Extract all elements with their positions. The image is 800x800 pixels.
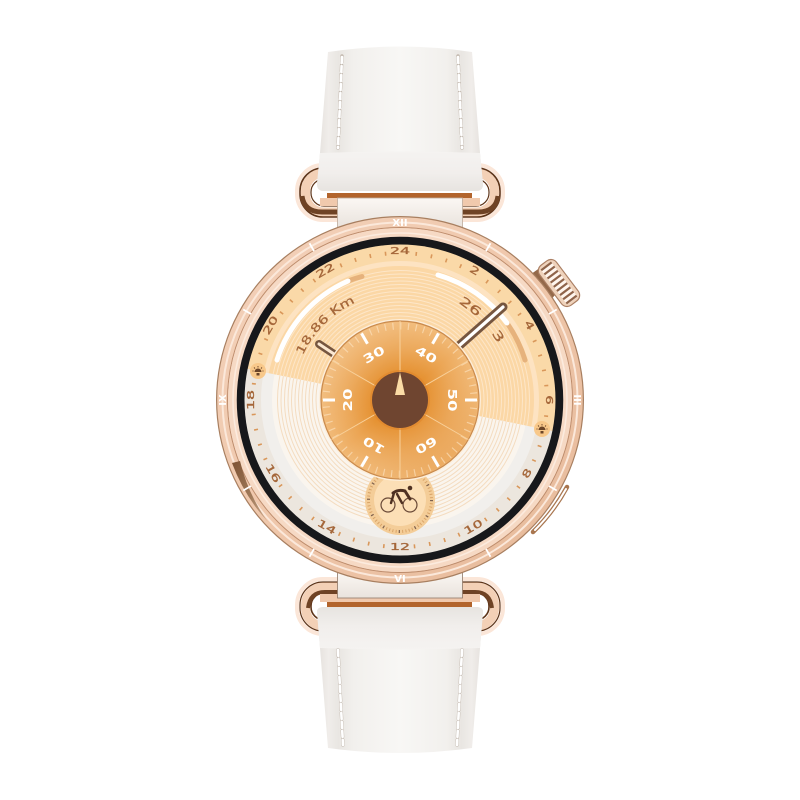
hour numbers: 6 <box>543 395 554 405</box>
dial night half <box>244 368 552 556</box>
hour numbers: 10 <box>462 518 485 538</box>
top brown strip <box>327 193 472 198</box>
disc shading <box>322 322 478 478</box>
bottom strap leather <box>317 607 483 753</box>
brown hub <box>372 372 428 428</box>
roman numerals: III <box>571 394 582 406</box>
top stitching <box>338 56 462 148</box>
hour numbers <box>246 246 554 553</box>
hour numbers: 22 <box>314 262 337 281</box>
inner highlight <box>233 233 567 567</box>
top strap <box>297 46 503 220</box>
disc numbers: 50 <box>445 388 459 412</box>
hour numbers: 8 <box>521 467 535 481</box>
crown <box>527 257 582 309</box>
hour numbers: 20 <box>262 314 281 337</box>
bottom strap <box>297 579 503 753</box>
value text 26: 26 <box>457 294 484 319</box>
bottom strap fold <box>317 607 483 650</box>
bezel shadow reflection <box>232 461 268 522</box>
spokes <box>332 321 468 479</box>
hour numbers: 18 <box>246 390 257 410</box>
watch case <box>216 216 584 585</box>
disc numbers: 60 <box>413 433 439 457</box>
roman numerals <box>218 218 582 585</box>
bezel inner groove <box>228 228 572 572</box>
hub glow <box>370 370 430 430</box>
top link bar <box>338 198 462 228</box>
disc numbers: 40 <box>413 343 439 367</box>
top strap fold <box>317 152 483 191</box>
subdial outer ring <box>365 465 435 535</box>
hour numbers: 12 <box>390 542 410 553</box>
roman numerals: VI <box>394 574 406 585</box>
black screen ring <box>241 241 559 559</box>
bezel ticks <box>243 243 557 557</box>
hour numbers: 4 <box>521 319 536 333</box>
distance text: 18.86 Km <box>296 298 354 354</box>
hour ticks <box>253 253 547 547</box>
hour numbers: 16 <box>262 462 282 485</box>
bezel <box>217 217 583 583</box>
short hand <box>319 344 340 358</box>
left progress arc <box>277 276 362 360</box>
activity subdial <box>365 465 435 535</box>
bottom link bar <box>338 572 462 598</box>
roman numerals: IX <box>218 394 229 406</box>
right progress arc <box>438 275 525 360</box>
disc halo <box>319 319 481 481</box>
minute ticks <box>326 326 474 474</box>
outer rim <box>216 216 584 584</box>
value text 3: 3 <box>489 327 507 345</box>
long hand <box>452 307 503 352</box>
subdial major ticks <box>368 468 432 532</box>
hour numbers: 14 <box>315 518 338 538</box>
roman numerals: XII <box>392 218 408 229</box>
dial day half <box>248 244 556 431</box>
bottom lug <box>297 579 503 634</box>
top strap leather <box>317 46 483 191</box>
watch dial <box>244 244 556 556</box>
bottom brown strip <box>327 602 472 607</box>
disc numbers: 30 <box>361 343 387 367</box>
disc numbers: 20 <box>341 388 355 412</box>
disc numbers: 10 <box>361 433 387 457</box>
icon: cyclist <box>381 486 417 512</box>
pointer <box>395 372 405 395</box>
hour numbers: 24 <box>390 246 410 257</box>
major ticks <box>323 333 477 467</box>
hour numbers: 2 <box>467 264 481 279</box>
subdial minor ticks <box>368 468 432 532</box>
disc numbers <box>341 343 459 457</box>
icon: sunset <box>250 363 266 379</box>
bezel highlight ring <box>222 222 578 578</box>
disc <box>321 321 479 479</box>
center dial <box>319 319 481 481</box>
icon: sunrise <box>534 421 550 437</box>
inner bezel <box>228 228 572 572</box>
top lug <box>297 165 503 220</box>
bottom stitching <box>338 650 462 745</box>
subdial inner <box>374 474 426 526</box>
crown neck <box>527 267 558 305</box>
side button <box>533 487 567 532</box>
crown knurled wheel <box>536 257 582 309</box>
